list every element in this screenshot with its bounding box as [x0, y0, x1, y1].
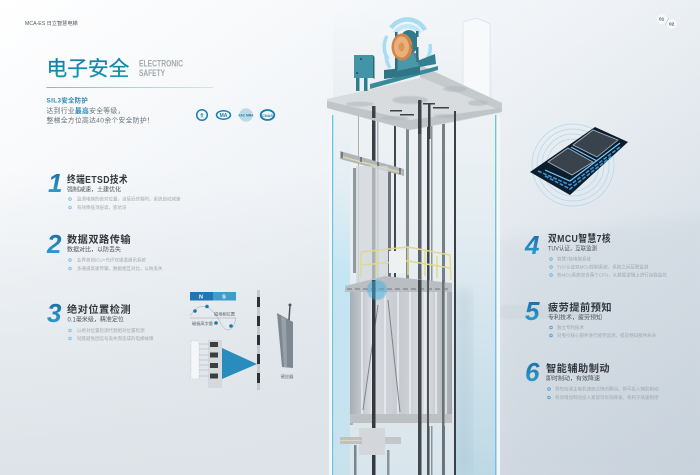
door header assembly	[340, 151, 404, 286]
feature 2	[46, 229, 163, 272]
feature 2 bullets: 业界首创ICU+光纤双通道通讯系统	[77, 257, 146, 264]
feature 1 bullets	[69, 196, 181, 211]
feature 2 heading: 数据双路传输	[67, 233, 131, 246]
feature 1 bullets: 监测电梯的绝对位置，当接近终端时，系统自动减速	[77, 196, 181, 203]
number 5: 5	[525, 296, 540, 326]
slab raised edge	[420, 65, 502, 111]
signal rings	[532, 124, 614, 206]
feature 3 subtitle: 0.1毫米级，精准定位	[68, 316, 124, 324]
page numbers	[657, 14, 677, 29]
concrete slab	[327, 65, 502, 130]
english title: SAFETY	[139, 68, 165, 79]
blue sensing triangle	[222, 348, 257, 379]
feature 6 bullets: 预先检测主电机速度过快的瞬间，即可投入辅助制动	[555, 386, 659, 393]
number 4: 4	[524, 230, 540, 260]
yellow safety railing	[361, 247, 451, 280]
intro text: SIL3安全防护	[46, 96, 88, 104]
circuit board	[530, 127, 628, 195]
sensor unit: 感应器	[281, 373, 294, 380]
feature 6 heading: 智能辅助制动	[546, 362, 610, 375]
rail stubs under slab	[372, 100, 456, 141]
inner shadow panel	[457, 290, 471, 475]
N S magnet bar: N	[199, 294, 203, 300]
feature 6 subtitle: 即时制动，有效降速	[546, 374, 600, 382]
intro text: 整梯全方位高达40余个安全防护！	[46, 116, 154, 125]
english title	[139, 59, 183, 79]
blue sensor glow on car	[367, 280, 387, 300]
traction motor	[392, 30, 423, 61]
feature 3 bullets: 以绝对位置检测代替相对位置检测	[77, 327, 145, 334]
feature 4 bullets	[550, 256, 667, 279]
sonar arcs	[384, 19, 430, 68]
logo 1: ft	[200, 114, 204, 120]
right wall panel above slab	[463, 18, 490, 98]
feature 4 heading: 双MCU智慧7核	[548, 232, 611, 245]
feature 4 bullets: TUV认证双MCU控制系统，系统之间互联监测	[557, 264, 649, 271]
feature 5 bullets: 对曳引核心部件进行疲劳监测，提前预知部件寿命	[557, 332, 656, 339]
sensor column	[191, 340, 222, 388]
board glow strips	[545, 143, 620, 181]
feature 3 bullets: 彻底避免因信号丢失而造成的电梯故障	[77, 335, 154, 342]
feature 1 heading: 终端ETSD技术	[67, 173, 128, 186]
car top frame	[345, 276, 452, 292]
number 3: 3	[47, 298, 62, 328]
guide rails and cables	[358, 100, 456, 475]
feature 4 bullets: 各MCU系统双含两个CPU，从数据逻辑上进行自我监控	[557, 272, 667, 279]
running header: MCA-ES 日立智慧电梯	[25, 19, 78, 27]
slab front edge	[327, 101, 502, 130]
divider rule	[46, 87, 213, 88]
magnetic wave: 磁极高字量	[192, 320, 213, 327]
feature 4	[524, 230, 667, 279]
feature 1 subtitle: 强制减速，土建优化	[67, 186, 121, 194]
dashed scale strip	[257, 290, 260, 390]
elevator car	[350, 292, 453, 426]
chip module	[530, 124, 628, 206]
N S magnet bar: S	[222, 294, 226, 300]
feature 4 bullets: 智慧7核电梯系统	[557, 256, 592, 263]
board blue traces	[538, 147, 620, 189]
title: 电子安全	[46, 58, 130, 80]
shaft edges	[329, 115, 500, 475]
feature 5 bullets: 独立专利技术	[557, 324, 584, 331]
feature 5 heading: 疲劳提前预知	[548, 301, 612, 314]
slab top face	[327, 65, 502, 130]
feature 5	[525, 296, 656, 339]
feature 6	[525, 357, 659, 401]
elevator shaft illustration	[327, 10, 502, 475]
N S magnet bar	[190, 292, 236, 300]
feature 2 bullets	[69, 257, 163, 272]
slab mottling	[346, 86, 488, 120]
car top detail	[347, 288, 451, 290]
page numbers: 01	[659, 16, 665, 22]
english title: ELECTRONIC	[139, 59, 183, 70]
number 1: 1	[48, 168, 62, 198]
feature 3	[47, 298, 154, 342]
feature 2 bullets: 多通道高速传输，数据相互对比，以防丢失	[77, 265, 163, 272]
intro text: 达到行业最高安全等级，	[46, 106, 125, 115]
chip plates	[548, 148, 593, 175]
machine base beams	[370, 31, 438, 89]
magnetic wave: 磁场相位置	[214, 310, 235, 318]
right wall tint	[455, 110, 495, 475]
shaft back wall	[332, 100, 497, 475]
certification logos	[197, 108, 274, 122]
lower door sill assembly	[340, 428, 401, 475]
feature 4 subtitle: TUV认证，互联监测	[548, 244, 597, 252]
feature 1	[48, 168, 181, 211]
feature 6 bullets: 有效增加制动投入紧留可有效降速，有利于快速制停	[555, 394, 659, 401]
upper wall glow	[333, 10, 493, 105]
logo 4: CNAS	[262, 114, 273, 118]
page numbers: 02	[669, 22, 675, 28]
feature 3 bullets	[69, 327, 154, 342]
rails in front of car	[372, 280, 444, 475]
feature 5 subtitle: 专利技术，疲劳预知	[548, 314, 602, 322]
feature 1 bullets: 有效降低顶层高，底坑深	[77, 204, 127, 211]
feature 5 bullets	[550, 324, 656, 339]
left wall tint	[334, 110, 350, 475]
feature 6 bullets	[548, 386, 659, 401]
number 2: 2	[46, 229, 62, 259]
control box	[354, 55, 374, 91]
intro text	[46, 96, 154, 125]
logo 3: IIAC MRA	[238, 114, 254, 118]
logo 2: MA	[220, 113, 228, 119]
feature 2 subtitle: 数据对比，以防丢失	[67, 246, 121, 254]
feature 3 heading: 绝对位置检测	[67, 303, 131, 316]
number 6: 6	[525, 357, 540, 387]
white machine on car top	[389, 251, 406, 273]
magnetic wave	[190, 305, 236, 330]
position sensor diagram	[190, 290, 294, 390]
